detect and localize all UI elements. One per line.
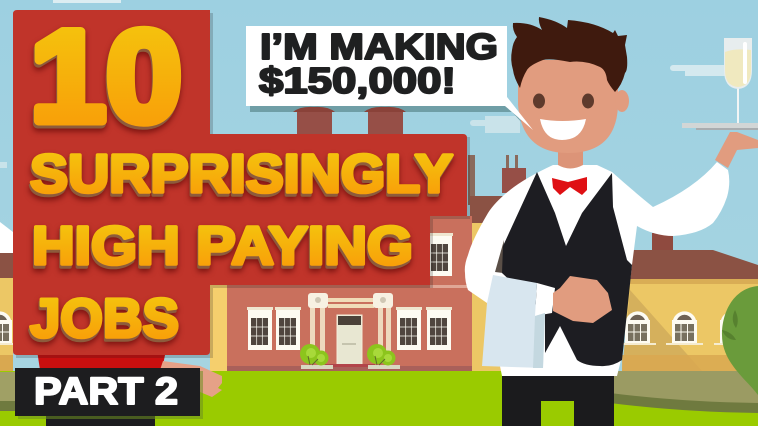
- face: [518, 60, 618, 153]
- shirt: [465, 162, 729, 376]
- neck: [558, 148, 583, 168]
- speech text line 1: I’M MAKING: [260, 26, 498, 67]
- portico: [308, 293, 393, 363]
- lawn: [0, 371, 758, 426]
- waiter: [465, 17, 758, 426]
- right building wing: [619, 233, 758, 371]
- clouds: [0, 0, 725, 168]
- towel: [482, 275, 545, 368]
- shirt cuff: [535, 283, 555, 316]
- vest: [502, 172, 632, 366]
- bushes: [300, 344, 400, 369]
- tree: [722, 286, 758, 395]
- heading line: JOBS: JOBS: [30, 287, 179, 349]
- hair: [511, 17, 627, 92]
- title panel: [13, 3, 470, 358]
- bow tie: [552, 177, 587, 195]
- left building wing: [0, 222, 18, 372]
- trousers: [502, 372, 614, 426]
- front door: [337, 315, 362, 365]
- part 2 badge: [15, 368, 203, 419]
- part 2 badge: PART 2: [34, 371, 178, 413]
- smile: [540, 119, 586, 140]
- ear: [615, 90, 629, 112]
- tray: [682, 123, 758, 130]
- hand on waist: [553, 276, 612, 323]
- number 10: 10: [30, 3, 182, 149]
- speech text line 2: $150,000!: [259, 60, 456, 101]
- speech bubble shadow: [250, 106, 524, 125]
- raised hand: [715, 132, 758, 168]
- main brick building: [210, 107, 526, 372]
- gravel path: [0, 371, 758, 413]
- speech bubble: [246, 26, 533, 130]
- person behind the title panel: [37, 350, 222, 426]
- eyes: [533, 94, 594, 108]
- heading line: HIGH PAYING: HIGH PAYING: [32, 216, 413, 276]
- heading line: SURPRISINGLY: SURPRISINGLY: [30, 144, 453, 204]
- champagne glass: [724, 38, 752, 123]
- window seen through arm gap: [495, 240, 504, 273]
